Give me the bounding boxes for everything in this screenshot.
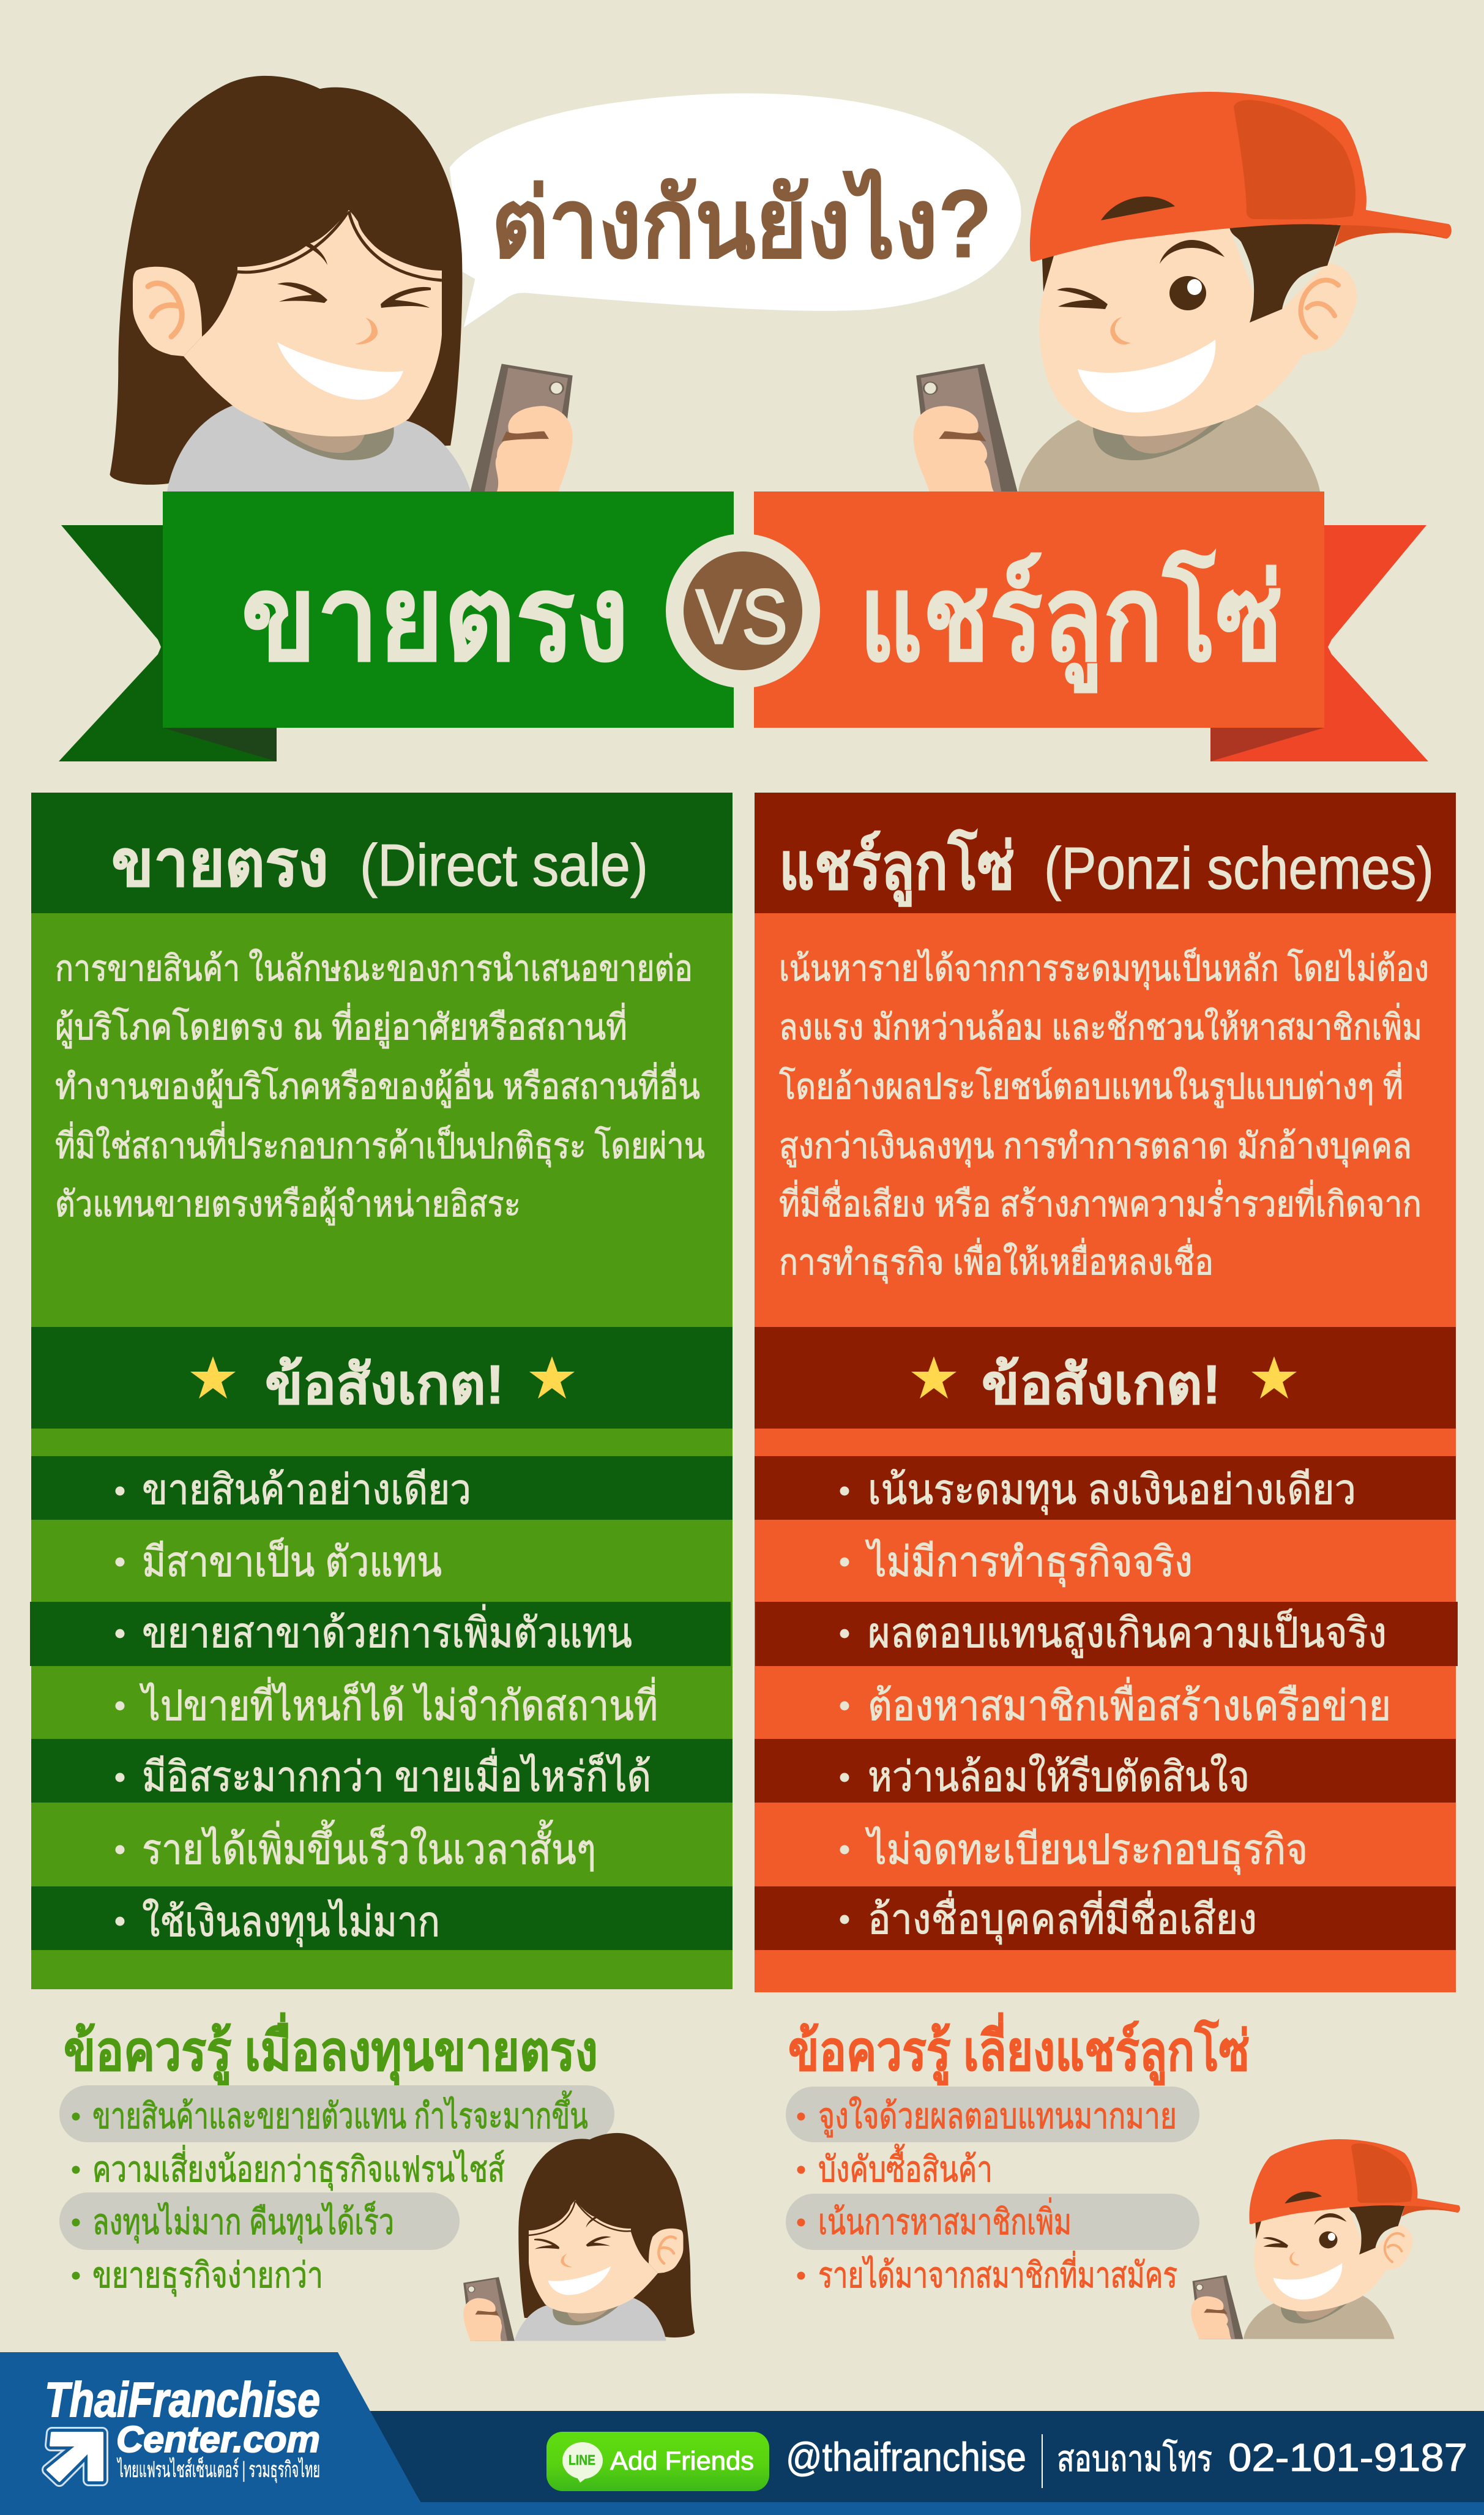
description left: ที่มิใช่สถานที่ประกอบการค้าเป็นปกติธุระ โดยผ่าน	[55, 1121, 705, 1168]
tip 1 left	[59, 2085, 614, 2142]
panel header right: (Ponzi schemes)	[1044, 835, 1434, 902]
description right: การทำธุรกิจ เพื่อให้เหยื่อหลงเชื่อ	[779, 1238, 1214, 1284]
tips heading left: ข้อควรรู้ เมื่อลงทุนขายตรง	[64, 2012, 598, 2086]
row 3 left: ขยายสาขาด้วยการเพิ่มตัวแทน	[142, 1604, 632, 1656]
speech bubble	[450, 93, 1021, 327]
row 2 left: มีสาขาเป็น ตัวแทน	[142, 1538, 442, 1585]
LINE add friends button	[546, 2432, 769, 2491]
row 7 right	[755, 1886, 1456, 1950]
banner title right: แชร์ลูกโซ่	[859, 549, 1283, 693]
logo tagline: ไทยแฟรนไชส์เซ็นเตอร์ | รวมธุรกิจไทย	[116, 2456, 320, 2483]
description left: ทำงานของผู้บริโภคหรือของผู้อื่น หรือสถานที่อื่น	[55, 1062, 700, 1108]
character: small girl	[463, 2133, 695, 2341]
row 4 right: ต้องหาสมาชิกเพื่อสร้างเครือข่าย	[868, 1677, 1391, 1729]
row 3 left	[30, 1602, 731, 1666]
footer bar	[0, 2352, 1484, 2515]
row 6 right: ไม่จดทะเบียนประกอบธุรกิจ	[865, 1826, 1308, 1875]
banner ribbon: right tail	[1210, 525, 1428, 761]
LINE icon	[562, 2442, 603, 2483]
banner: direct sale	[163, 491, 734, 728]
VS text: VS	[696, 574, 788, 660]
contact: phone number: 02-101-9187	[1228, 2435, 1467, 2479]
description right: สูงกว่าเงินลงทุน การทำการตลาด มักอ้างบุคคล	[779, 1126, 1412, 1168]
observations heading right	[755, 1327, 1456, 1429]
row 1 left: ขายสินค้าอย่างเดียว	[142, 1467, 471, 1513]
description right: ที่มีชื่อเสียง หรือ สร้างภาพความร่ำรวยที่เกิดจาก	[779, 1179, 1422, 1224]
row 4 left: ไปขายที่ไหนก็ได้ ไม่จำกัดสถานที่	[140, 1677, 658, 1729]
character: small boy	[1191, 2139, 1460, 2339]
row 1 left	[31, 1456, 733, 1520]
character: girl with phone	[110, 76, 573, 491]
tip 4 right: รายได้มาจากสมาชิกที่มาสมัคร	[818, 2251, 1177, 2295]
contact: phone number: สอบถามโทร	[1057, 2438, 1212, 2479]
description left: ผู้บริโภคโดยตรง ณ ที่อยู่อาศัยหรือสถานที่	[55, 1003, 627, 1048]
description right: โดยอ้างผลประโยชน์ตอบแทนในรูปแบบต่างๆ ที่	[779, 1062, 1403, 1108]
character: boy with cap and phone	[913, 92, 1452, 491]
panel header left: (Direct sale)	[360, 832, 648, 899]
row 2 right: ไม่มีการทำธุรกิจจริง	[865, 1538, 1193, 1587]
row 5 left: มีอิสระมากกว่า ขายเมื่อไหร่ก็ได้	[142, 1748, 651, 1800]
observations heading left: ข้อสังเกต!	[265, 1355, 504, 1416]
speech bubble text: ต่างกันยังไง?	[491, 168, 992, 278]
panel header left: ขายตรง	[111, 828, 329, 900]
tips heading right: ข้อควรรู้ เลี่ยงแชร์ลูกโซ่	[788, 2012, 1250, 2085]
tip 2 left	[72, 2145, 505, 2191]
tip 1 right: จูงใจด้วยผลตอบแทนมากมาย	[818, 2096, 1177, 2137]
contact: phone number	[1042, 2434, 1467, 2488]
row 5 right	[755, 1739, 1456, 1803]
observations heading left	[31, 1327, 733, 1429]
panel header right	[755, 793, 1456, 913]
description right	[779, 947, 1429, 1284]
row 3 right: ผลตอบแทนสูงเกินความเป็นจริง	[868, 1609, 1387, 1658]
banner title left: ขายตรง	[241, 551, 629, 686]
contact: line handle: @thaifranchise	[786, 2434, 1026, 2479]
tip 3 left	[59, 2192, 460, 2250]
section: tips for direct sale	[59, 2012, 614, 2297]
description left: ตัวแทนขายตรงหรือผู้จำหน่ายอิสระ	[55, 1184, 521, 1225]
LINE icon: LINE	[569, 2452, 595, 2468]
panel header left	[31, 793, 733, 913]
section: tips for avoiding ponzi	[786, 2012, 1250, 2295]
row 5 right: หว่านล้อมให้รีบตัดสินใจ	[868, 1753, 1250, 1800]
VS badge	[666, 534, 820, 688]
tip 1 left: ขายสินค้าและขยายตัวแทน กำไรจะมากขึ้น	[92, 2091, 588, 2136]
row 5 left	[31, 1739, 733, 1803]
logo: Center.com	[116, 2419, 320, 2460]
tip 4 left: ขยายธุรกิจง่ายกว่า	[92, 2255, 323, 2297]
row 1 right: เน้นระดมทุน ลงเงินอย่างเดียว	[868, 1467, 1356, 1515]
banner ribbon: left tail	[59, 525, 277, 761]
tip 1 right	[786, 2087, 1199, 2142]
tip 2 right	[797, 2144, 993, 2189]
panel header right: แชร์ลูกโซ่	[779, 829, 1015, 907]
row 1 right	[755, 1456, 1456, 1520]
logo arrow icon	[48, 2433, 102, 2481]
description left	[55, 948, 705, 1225]
panel: direct sale	[30, 793, 733, 1989]
row 6 left: รายได้เพิ่มขึ้นเร็วในเวลาสั้นๆ	[142, 1820, 596, 1873]
row 3 right	[755, 1602, 1458, 1666]
row 7 left: ใช้เงินลงทุนไม่มาก	[142, 1898, 440, 1947]
description left: การขายสินค้า ในลักษณะของการนำเสนอขายต่อ	[55, 948, 693, 988]
observations heading right: ข้อสังเกต!	[982, 1355, 1221, 1416]
banner: ponzi scheme	[754, 491, 1324, 728]
LINE add friends button: Add Friends	[610, 2446, 754, 2476]
tip 4 right	[797, 2251, 1177, 2295]
tip 3 right: เน้นการหาสมาชิกเพิ่ม	[818, 2197, 1072, 2242]
row 7 right: อ้างชื่อบุคคลที่มีชื่อเสียง	[868, 1891, 1257, 1945]
tip 2 right: บังคับซื้อสินค้า	[818, 2144, 993, 2189]
logo	[45, 2372, 320, 2483]
panel: ponzi scheme	[755, 793, 1458, 1992]
tip 2 left: ความเสี่ยงน้อยกว่าธุรกิจแฟรนไชส์	[92, 2145, 505, 2191]
row 7 left	[31, 1886, 733, 1950]
tip 3 left: ลงทุนไม่มาก คืนทุนได้เร็ว	[92, 2201, 394, 2244]
logo: ThaiFranchise	[45, 2372, 320, 2427]
tip 3 right	[786, 2194, 1199, 2250]
